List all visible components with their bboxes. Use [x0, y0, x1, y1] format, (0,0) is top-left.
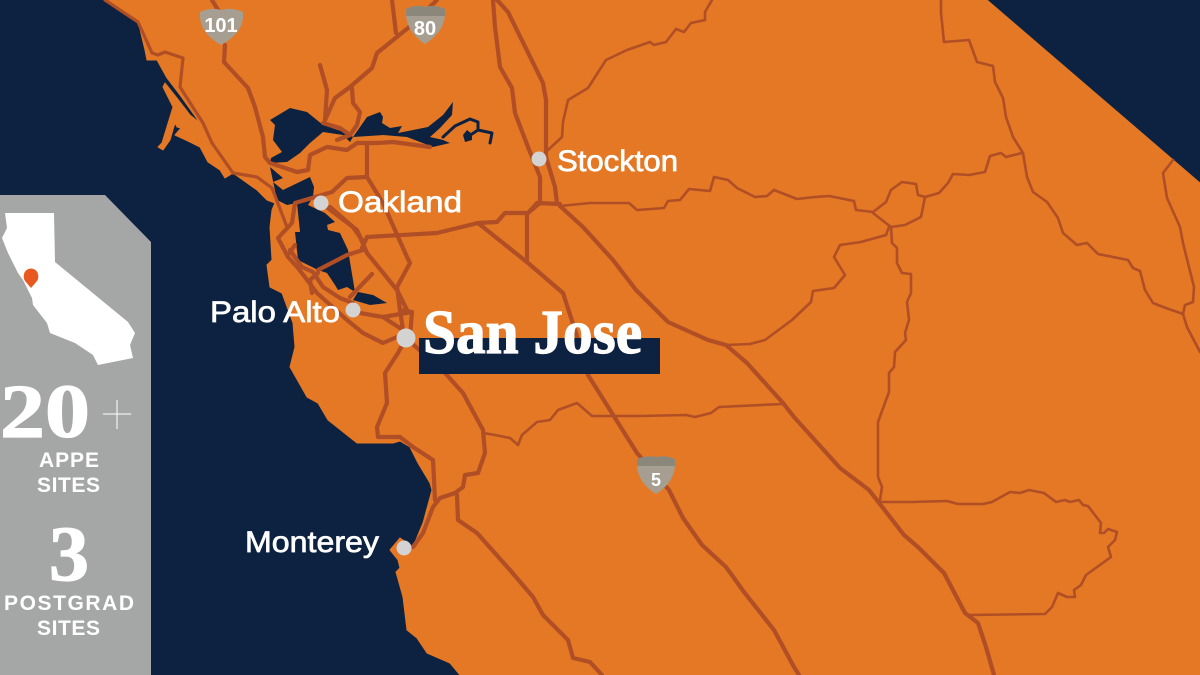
water: San Pablo Bay and delta [270, 102, 453, 163]
stat label: postgrad sites second line: SITES [37, 617, 100, 640]
city label: San Jose: San Jose [423, 299, 642, 367]
thin county roads [483, 0, 1200, 615]
California silhouette [2, 213, 135, 365]
city marker: Oakland [314, 196, 328, 210]
thick highways [212, 0, 994, 675]
highway shield: 80 [406, 6, 445, 44]
highway shield: 101: 101 [204, 15, 238, 37]
city marker: Monterey [396, 540, 412, 556]
highway shield: 5 [637, 456, 675, 494]
highway shield: 101 [200, 9, 243, 45]
water: far south bay [353, 292, 387, 305]
city marker: Palo Alto [346, 302, 360, 318]
city label: Oakland: Oakland [338, 186, 462, 219]
stat number: 20: 20 [0, 370, 90, 454]
location pin [24, 268, 38, 288]
plus sign [103, 400, 131, 429]
city marker: San Jose [396, 328, 416, 348]
water: delta pool [463, 130, 472, 142]
city label: Monterey: Monterey [245, 526, 379, 559]
stat label: postgrad sites: POSTGRAD [4, 592, 134, 615]
medium coastal road [105, 0, 287, 227]
stat number: 3: 3 [49, 510, 89, 597]
city marker: Stockton [532, 152, 546, 166]
San Jose label backing bar [419, 338, 660, 374]
water: delta river channel [443, 119, 492, 143]
stat label: APPE sites: APPE [39, 449, 99, 472]
highway shield: 80: 80 [414, 18, 436, 40]
water: central and south San Francisco Bay [270, 167, 355, 292]
stats panel [0, 195, 151, 675]
city label: Palo Alto: Palo Alto [210, 296, 340, 329]
highway shield: 5: 5 [651, 470, 661, 490]
stat label: APPE sites second line: SITES [37, 474, 100, 497]
city label: Stockton: Stockton [557, 145, 678, 178]
